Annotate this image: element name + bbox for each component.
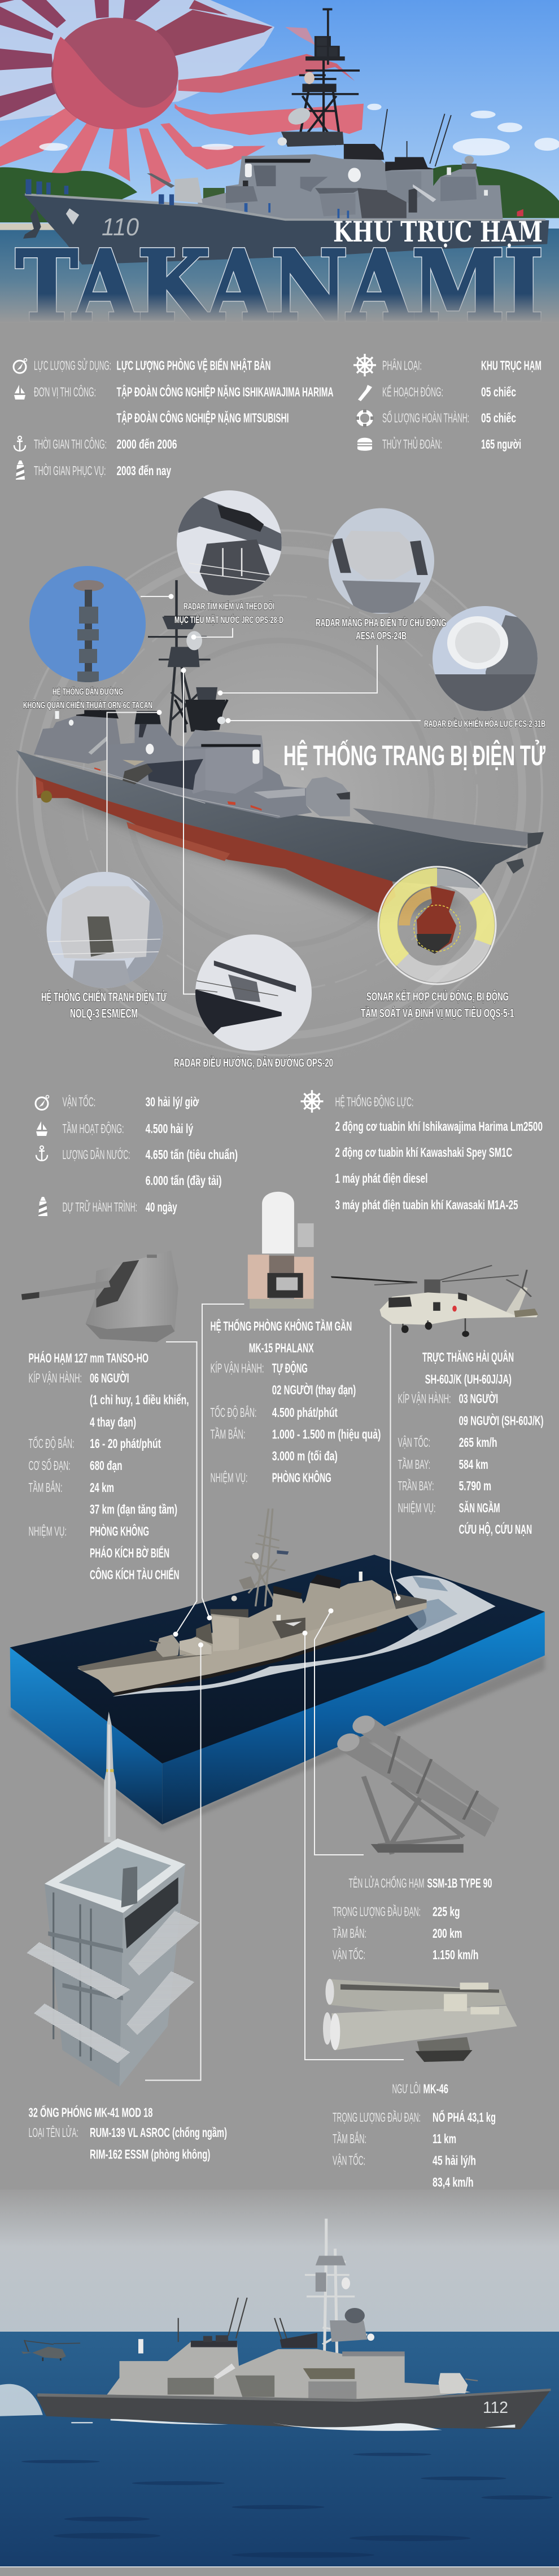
text: gun specs: PHÁO KÍCH BỜ BIỂN	[90, 1545, 169, 1560]
text: gun specs: 4 thay đạn)	[90, 1415, 136, 1429]
header photo: destroyer 110 with rising sun flag	[0, 0, 559, 323]
text: torpedo specs: 45 hải lý/h	[433, 2153, 476, 2168]
icon: lifebuoy	[356, 409, 374, 427]
info rows left: TẬP ĐOÀN CÔNG NGHIỆP NẶNG MITSUBISHI	[116, 410, 289, 425]
weapon: SSM-1B launcher	[333, 1712, 499, 1854]
sky	[0, 2189, 559, 2333]
footer rule	[0, 2566, 559, 2568]
icon: compass	[36, 1095, 49, 1110]
icon: flashlight	[358, 385, 372, 401]
info rows right: 05 chiếc	[481, 411, 516, 425]
performance rows	[62, 1094, 238, 1214]
text: gun specs: (1 chỉ huy, 1 điều khiển,	[90, 1393, 189, 1407]
text: gun specs: TẦM BẮN:	[28, 1480, 62, 1495]
text: helicopter specs: SĂN NGẦM	[459, 1500, 500, 1515]
helicopter	[21, 2347, 66, 2359]
icon: ship wheel	[300, 1090, 323, 1113]
superstructure	[180, 1580, 396, 1655]
text: launcher specs: 32 ỐNG PHÓNG MK-41 MOD 18	[28, 2105, 153, 2120]
text: gun specs: TỐC ĐỘ BẮN:	[28, 1436, 75, 1451]
text: helicopter specs: TRẦN BAY:	[398, 1478, 434, 1493]
text: CIWS specs: 1.000 - 1.500 m (hiệu quả)	[272, 1427, 381, 1441]
info rows right	[382, 358, 541, 451]
weapon: SH-60 helicopter	[331, 1266, 538, 1337]
sea	[0, 2332, 559, 2566]
text: torpedo specs: NGƯ LÔI	[392, 2081, 421, 2096]
mast	[305, 2219, 367, 2354]
info rows right: SỐ LƯỢNG HOÀN THÀNH:	[382, 410, 469, 425]
text: CIWS specs: TẦM BẮN:	[210, 1427, 245, 1441]
block	[10, 1555, 545, 1831]
icon: boat	[14, 385, 25, 400]
photo circle: TACAN	[28, 564, 148, 686]
text: helicopter specs	[398, 1349, 544, 1537]
propulsion rows	[335, 1094, 543, 1212]
lattice mast	[292, 56, 360, 145]
panel: electronic systems	[0, 488, 559, 1095]
hills	[0, 165, 559, 230]
text: helicopter specs: KÍP VẬN HÀNH:	[398, 1392, 451, 1406]
performance rows: 30 hải lý/ giờ	[146, 1095, 199, 1109]
info rows left: LỰC LƯỢNG PHÒNG VỆ BIỂN NHẬT BẢN	[116, 357, 271, 372]
callout labels: MỤC TIÊU MẶT NƯỚC JRC OPS-28-D	[174, 615, 283, 625]
text: missile specs: TẦM BẮN:	[333, 1925, 366, 1941]
ship 110 forward deck and gun	[147, 173, 257, 222]
info rows left: 2000 đến 2006	[116, 437, 177, 451]
text: CIWS specs: 02 NGƯỜI (thay đạn)	[272, 1382, 356, 1397]
icon: compass	[14, 359, 27, 373]
text: helicopter specs: VẬN TỐC:	[398, 1434, 430, 1450]
text: helicopter specs: TẦM BAY:	[398, 1456, 430, 1472]
destroyer on the sea block	[77, 1508, 496, 1697]
icon: anchor	[36, 1146, 47, 1161]
weapon: MK-15 Phalanx	[248, 1192, 314, 1309]
text: gun specs: KÍP VẬN HÀNH:	[28, 1371, 82, 1385]
performance rows: 4.500 hải lý	[146, 1121, 193, 1136]
info rows left: THỜI GIAN THI CÔNG:	[34, 436, 107, 451]
photo circle: FCS-2-31B	[432, 605, 539, 712]
mast	[245, 1508, 285, 1607]
callout labels: RADAR ĐIỀU HƯỚNG, DẪN ĐƯỜNG OPS-20	[174, 1056, 333, 1070]
tower	[27, 1838, 200, 2087]
text: missile specs: TÊN LỬA CHỐNG HẠM	[349, 1875, 425, 1890]
text: gun specs	[28, 1350, 189, 1582]
propulsion rows: 1 máy phát điện diesel	[335, 1171, 428, 1186]
spray	[0, 2384, 43, 2416]
text: gun specs: 680 đạn	[90, 1458, 122, 1473]
callout labels: HỆ THỐNG DẪN ĐƯỜNG	[53, 686, 123, 697]
text: CIWS specs: 3.000 m (tối đa)	[272, 1449, 338, 1463]
bow wave	[271, 2422, 442, 2431]
info rows left: TẬP ĐOÀN CÔNG NGHIỆP NẶNG ISHIKAWAJIMA HARIMA	[116, 384, 333, 400]
icon: anchor	[14, 436, 25, 451]
text: missile specs: 225 kg	[433, 1904, 460, 1919]
waves	[21, 2453, 553, 2558]
performance specs	[36, 1090, 543, 1216]
ship shadow	[54, 796, 464, 919]
hull	[36, 2390, 551, 2429]
text: torpedo specs: NỔ PHÁ 43,1 kg	[433, 2109, 496, 2125]
photo circle: radar OPS-24B	[327, 507, 436, 615]
icon: captain cap	[357, 438, 372, 451]
ship 110 hull	[23, 179, 549, 265]
text: missile specs: 200 km	[433, 1926, 462, 1941]
info rows left: LỰC LƯỢNG SỬ DỤNG:	[34, 357, 111, 372]
footer photo: destroyer 112 at sea	[0, 2189, 559, 2568]
text: CIWS specs: 4.500 phát/phút	[272, 1405, 338, 1420]
text: torpedo specs: MK-46	[423, 2081, 448, 2096]
text: torpedo specs: 83,4 km/h	[433, 2175, 474, 2189]
text: CIWS specs: TỐC ĐỘ BẮN:	[210, 1405, 256, 1420]
sky	[0, 0, 559, 231]
info rows right: 165 người	[481, 437, 521, 451]
text: CIWS specs: PHÒNG KHÔNG	[272, 1469, 331, 1485]
text: launcher specs: RIM-162 ESSM (phòng không)	[90, 2147, 210, 2161]
photo circle: NOLQ-3	[45, 871, 165, 990]
weapon: 127 mm gun	[21, 1250, 178, 1342]
callout labels: NOLQ-3 ESM/ECM	[70, 1007, 138, 1020]
hull	[77, 1600, 427, 1693]
text: torpedo specs: 11 km	[433, 2131, 456, 2146]
text: CIWS specs	[210, 1318, 381, 1485]
ship model	[16, 580, 544, 912]
grating platforms	[27, 1942, 130, 2063]
icon: lighthouse	[38, 1197, 47, 1216]
callout labels	[23, 600, 545, 1070]
icon: lighthouse	[16, 460, 25, 480]
performance rows: LƯỢNG DÃN NƯỚC:	[62, 1147, 130, 1162]
connector lines	[107, 594, 421, 994]
photo circle: radar OPS-28D	[175, 488, 282, 598]
side faces	[10, 1647, 162, 1824]
info rows right: THỦY THỦ ĐOÀN:	[382, 436, 442, 451]
weapon: torpedo tubes	[323, 1979, 517, 2062]
info rows left: THỜI GIAN PHỤC VỤ:	[34, 463, 106, 478]
text: helicopter specs: SH-60J/K (UH-60J/JA)	[425, 1372, 512, 1386]
text: helicopter specs: 03 NGƯỜI	[459, 1391, 498, 1406]
info rows left	[34, 357, 333, 478]
performance rows: VẬN TỐC:	[62, 1094, 95, 1109]
block soft shadow	[11, 1656, 545, 1831]
VLS and gun	[180, 1638, 212, 1655]
rising sun flag	[0, 0, 364, 194]
text: gun specs: 16 - 20 phát/phút	[90, 1436, 161, 1451]
text: missile specs: 1.150 km/h	[433, 1947, 479, 1962]
missile	[104, 1712, 116, 1842]
text: gun specs: 06 NGƯỜI	[90, 1370, 129, 1385]
photo circle: OPS-20	[194, 933, 313, 1052]
text: helicopter specs: 265 km/h	[459, 1435, 497, 1450]
hull	[16, 750, 544, 912]
text: gun specs: PHÁO HẠM 127 mm TANSO-HO	[28, 1350, 149, 1366]
text: missile specs: SSM-1B TYPE 90	[427, 1876, 492, 1890]
superstructure silhouette	[226, 154, 503, 223]
performance rows: 4.650 tấn (tiêu chuẩn)	[146, 1147, 238, 1162]
icon: ship wheel	[353, 354, 376, 376]
info rows right: 05 chiếc	[481, 385, 516, 400]
text: gun specs: 37 km (đạn tăng tầm)	[90, 1502, 177, 1517]
text: gun specs: 24 km	[90, 1480, 114, 1495]
text: gun specs: CÔNG KÍCH TÀU CHIẾN	[90, 1566, 180, 1582]
text: torpedo specs: TRỌNG LƯỢNG ĐẦU ĐẠN:	[333, 2109, 421, 2125]
icon: boat	[36, 1121, 47, 1136]
text: CIWS specs: HỆ THỐNG PHÒNG KHÔNG TẦM GẦN	[210, 1318, 352, 1333]
text: missile specs: VẬN TỐC:	[333, 1947, 365, 1962]
callout labels: RADAR TÌM KIẾM VÀ THEO DÕI	[184, 600, 274, 612]
propulsion rows: HỆ THỐNG ĐỘNG LỰC:	[335, 1094, 413, 1109]
text: CIWS specs: KÍP VẬN HÀNH:	[210, 1361, 264, 1376]
text: launcher specs	[28, 2105, 227, 2161]
text: launcher specs: LOẠI TÊN LỬA:	[28, 2124, 78, 2140]
text: missile specs: TRỌNG LƯỢNG ĐẦU ĐẠN:	[333, 1904, 421, 1919]
performance rows: TẦM HOẠT ĐỘNG:	[62, 1121, 124, 1136]
sea	[0, 229, 559, 323]
callout labels: RADAR MẢNG PHA ĐIỆN TỬ CHỦ ĐỘNG	[316, 617, 446, 629]
text: missile specs	[333, 1875, 492, 1962]
text: torpedo specs: VẬN TỐC:	[333, 2152, 365, 2168]
text: CIWS specs: NHIỆM VỤ:	[210, 1471, 247, 1485]
performance rows: 40 ngày	[146, 1200, 177, 1214]
text: torpedo specs	[333, 2081, 496, 2189]
sea block with ship	[10, 1508, 545, 1831]
connector lines to weapons	[145, 1304, 404, 2080]
text: gun specs: PHÒNG KHÔNG	[90, 1523, 149, 1538]
info rows left: 2003 đến nay	[116, 463, 171, 478]
sonar ring	[378, 867, 496, 984]
text: gun specs: CƠ SỐ ĐẠN:	[28, 1458, 70, 1473]
superstructure	[34, 700, 350, 818]
crew and deck detail	[25, 179, 174, 205]
background halo and rings	[0, 508, 559, 1095]
text: helicopter specs: NHIỆM VỤ:	[398, 1500, 436, 1515]
text: helicopter specs: 5.790 m	[459, 1478, 491, 1493]
text: launcher specs: RUM-139 VL ASROC (chống ngầm)	[90, 2125, 227, 2140]
mast	[148, 580, 217, 738]
ship 110 superstructure and lower mast	[226, 56, 523, 223]
foam	[113, 1576, 496, 1697]
callout labels: AESA OPS-24B	[356, 630, 407, 642]
text: gun specs: NHIỆM VỤ:	[28, 1524, 67, 1538]
info rows right: PHÂN LOẠI:	[382, 358, 422, 372]
sea surface	[10, 1555, 545, 1763]
performance rows: 6.000 tấn (đầy tải)	[146, 1173, 222, 1188]
text: helicopter specs: 584 km	[459, 1457, 488, 1472]
info rows right: KẾ HOẠCH ĐÓNG:	[382, 384, 443, 400]
weapon: MK-41 launcher tower and missile	[27, 1712, 200, 2087]
callout labels: KHÔNG QUÂN CHIẾN THUẬT ORN-6C TACAN	[23, 700, 152, 710]
clouds	[39, 104, 559, 156]
hull number 110: 110	[102, 213, 139, 241]
general info panel	[14, 354, 541, 480]
upper mast	[316, 8, 339, 65]
performance rows: DỰ TRỮ HÀNH TRÌNH:	[62, 1199, 137, 1214]
superstructure	[107, 2342, 470, 2402]
info rows left: ĐƠN VỊ THI CÔNG:	[34, 384, 96, 400]
hull number 112: 112	[483, 2399, 508, 2417]
text: CIWS specs: TỰ ĐỘNG	[272, 1361, 308, 1376]
text: torpedo specs: TẦM BẮN:	[333, 2131, 366, 2146]
callout labels: HỆ THỐNG CHIẾN TRANH ĐIỆN TỬ	[41, 990, 167, 1004]
text: CIWS specs: MK-15 PHALANX	[249, 1341, 314, 1355]
